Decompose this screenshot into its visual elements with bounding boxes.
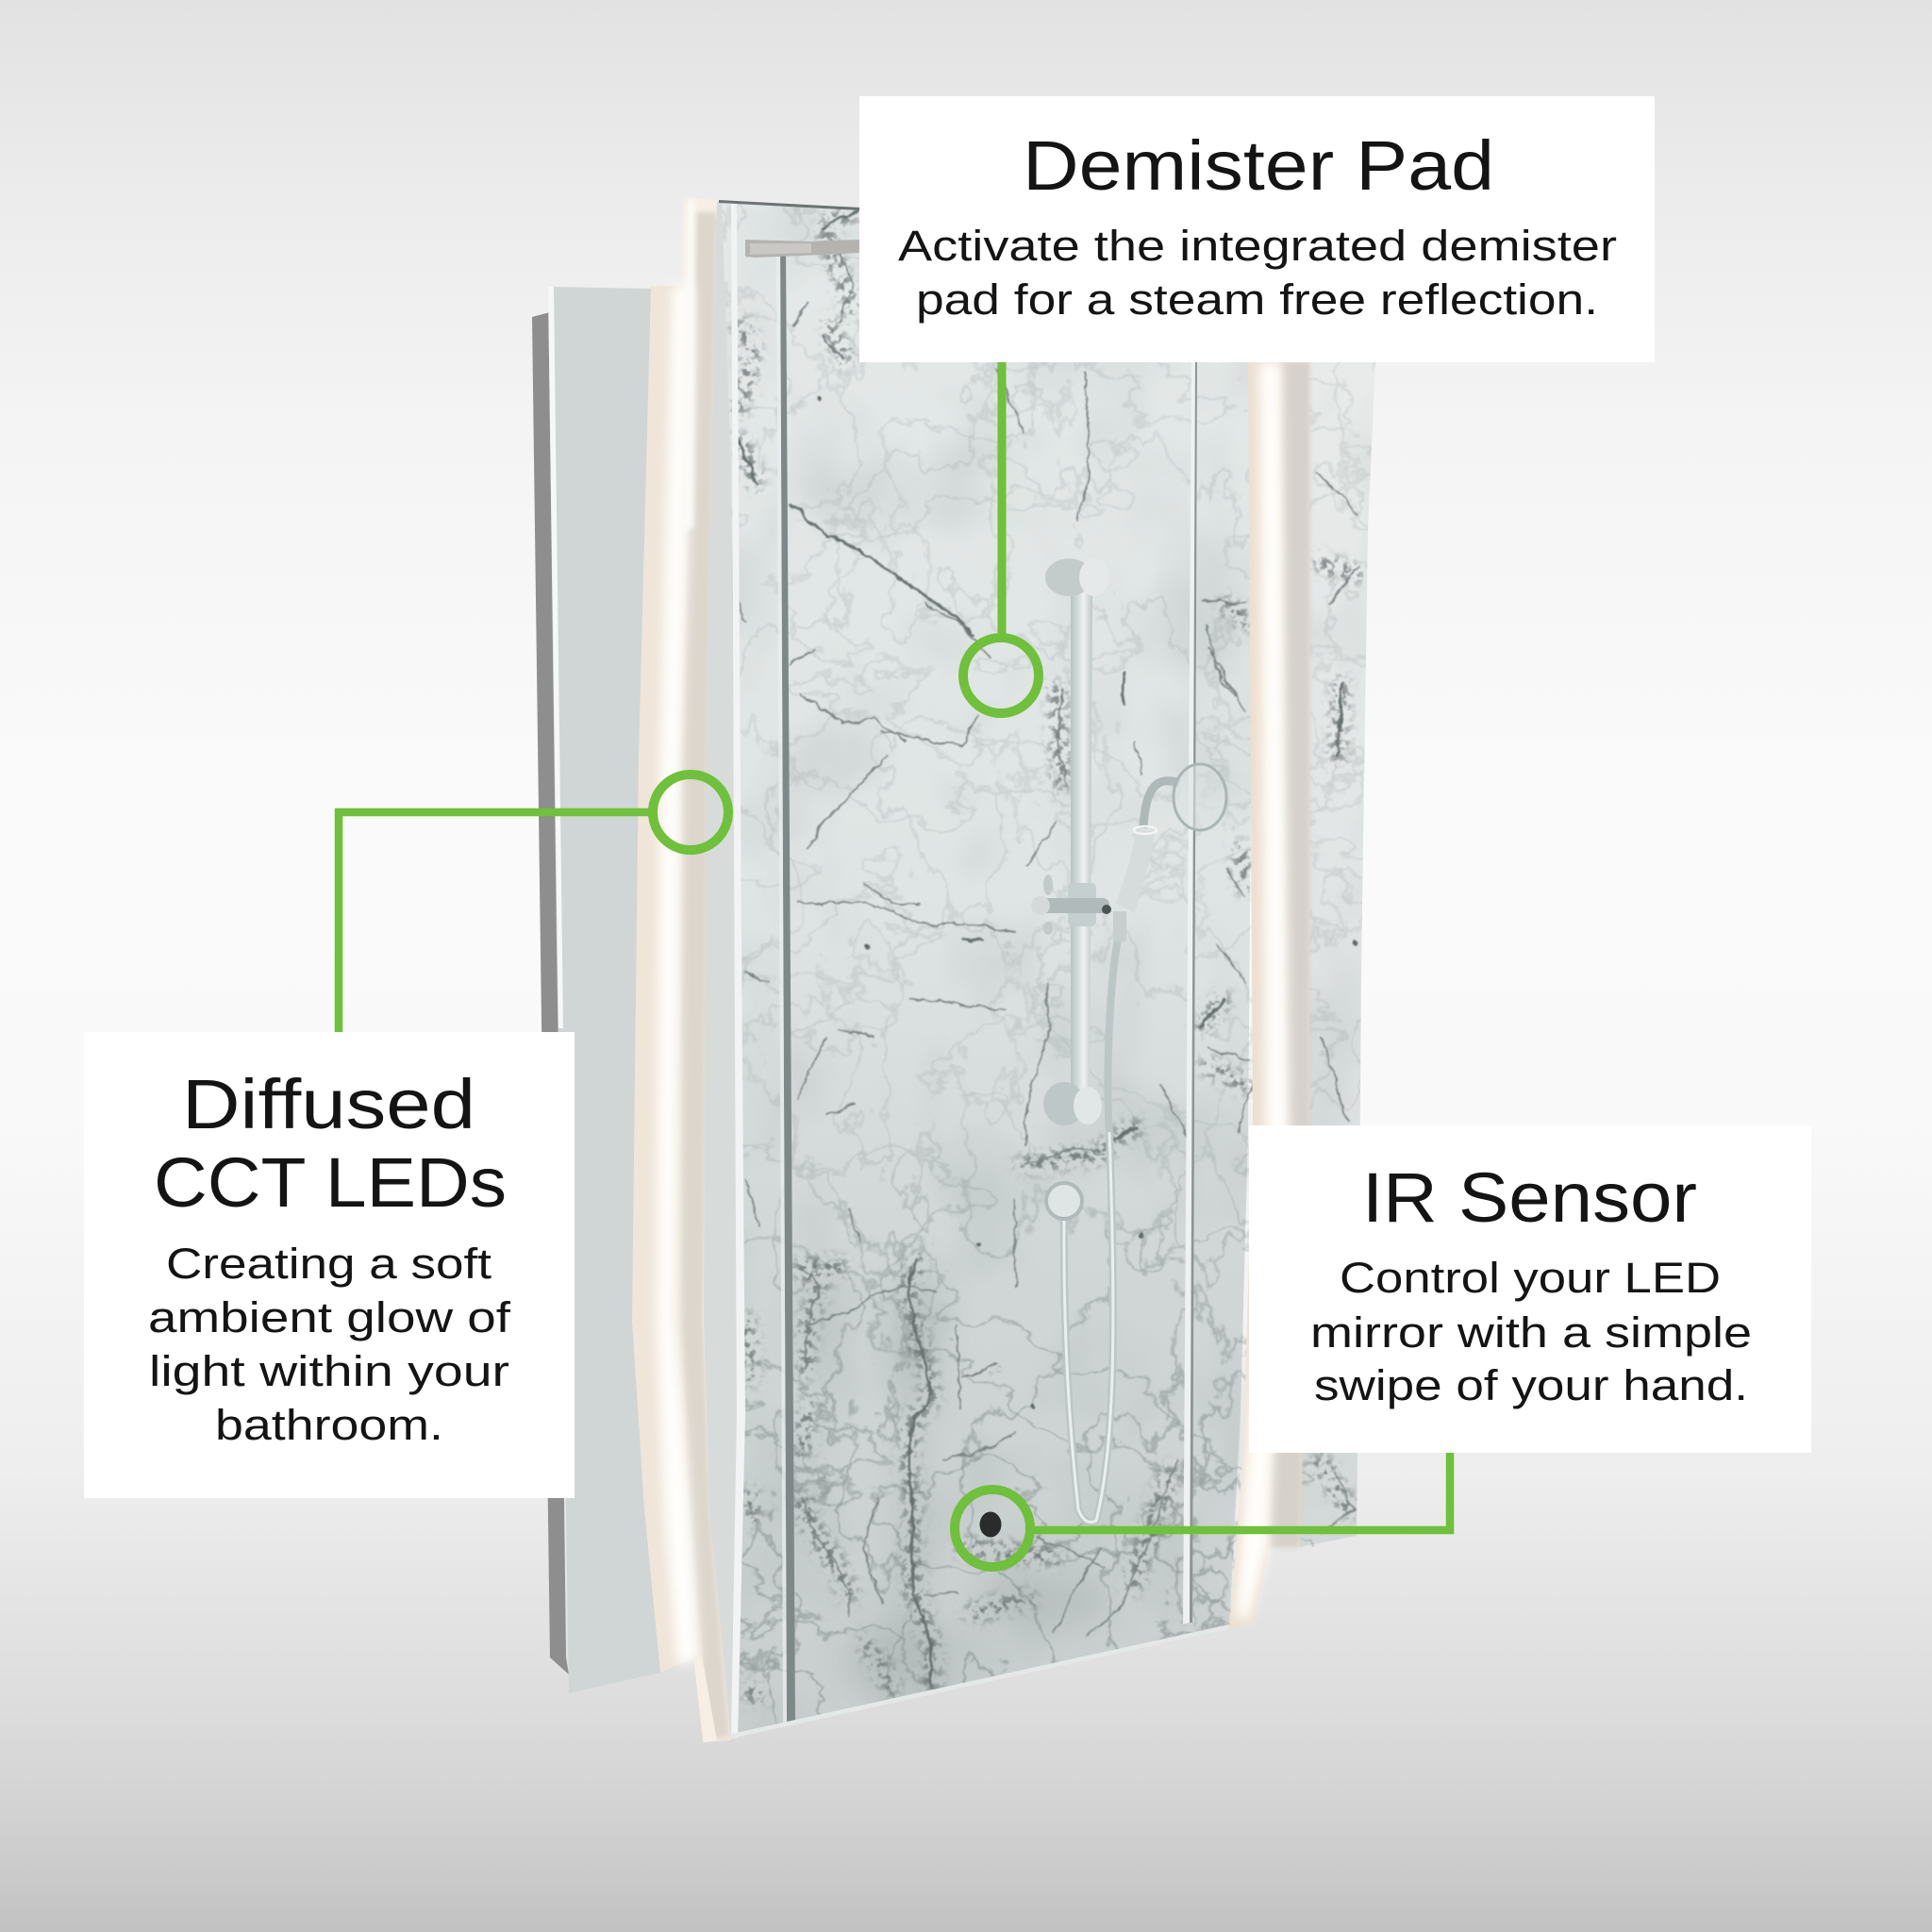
bottom edge highlight bbox=[731, 1624, 1229, 1739]
mirror illustration bbox=[532, 189, 1396, 1755]
description: ambient glow of bbox=[148, 1293, 511, 1341]
hose connector bbox=[1113, 911, 1126, 941]
left dark channel line bbox=[780, 247, 795, 1723]
warm glow base bbox=[1229, 362, 1309, 1629]
dark specks bbox=[818, 400, 1356, 1407]
slider valve bbox=[1031, 874, 1111, 935]
ir sensor dot bbox=[979, 1511, 1002, 1538]
shower fitting bbox=[1031, 558, 1226, 1523]
callout: demister pad bbox=[859, 96, 1655, 362]
lower bracket bbox=[1043, 1082, 1102, 1125]
grey side band bbox=[704, 202, 740, 1739]
description: mirror with a simple bbox=[1310, 1308, 1752, 1357]
wall bar bbox=[745, 240, 860, 258]
beige shaded band bbox=[1269, 362, 1309, 1547]
top edge dark line bbox=[719, 200, 860, 210]
callout: diffused CCT LEDs bbox=[84, 1032, 575, 1498]
left channel highlight bbox=[776, 247, 787, 1723]
heading: CCT LEDs bbox=[154, 1143, 507, 1222]
veins bbox=[738, 209, 1358, 1687]
warm glow band bbox=[632, 198, 731, 1742]
rail bbox=[1071, 590, 1092, 1094]
heading: IR Sensor bbox=[1362, 1158, 1697, 1237]
description: swipe of your hand. bbox=[1314, 1361, 1748, 1409]
bar highlight bbox=[750, 243, 811, 255]
heading: Demister Pad bbox=[1023, 126, 1494, 205]
upper panel bright strip bbox=[681, 200, 695, 528]
bright top wash bbox=[686, 198, 719, 219]
description: Activate the integrated demister bbox=[898, 222, 1617, 270]
description bbox=[898, 222, 1617, 324]
connector: IR sensor bbox=[955, 1453, 1450, 1567]
shower head bbox=[1174, 764, 1226, 830]
marble textures bbox=[698, 189, 1396, 1755]
description bbox=[1310, 1254, 1752, 1409]
description: Creating a soft bbox=[166, 1240, 492, 1288]
lower left bright edge bbox=[693, 1656, 717, 1742]
heading: Diffused bbox=[182, 1065, 475, 1143]
connector: demister bbox=[963, 362, 1039, 713]
description: Control your LED bbox=[1340, 1254, 1721, 1302]
left wall panel bbox=[548, 287, 660, 1693]
lower shading bbox=[800, 1264, 1113, 1698]
bar body bbox=[745, 240, 860, 258]
back edge strip bbox=[532, 312, 569, 1674]
hose highlight bbox=[1064, 1132, 1113, 1523]
connector: LEDs bbox=[339, 774, 728, 1032]
right LED glow bbox=[1229, 362, 1309, 1629]
mottled clouding bbox=[732, 207, 1372, 1560]
white LED core bbox=[1236, 362, 1289, 1618]
wall panel highlight edge bbox=[548, 287, 563, 1028]
callout: IR sensor bbox=[1249, 1125, 1811, 1453]
description: bathroom. bbox=[215, 1401, 443, 1449]
panel left edge highlight bbox=[731, 202, 745, 1739]
right channel core bbox=[1190, 362, 1197, 1623]
description bbox=[148, 1240, 511, 1449]
handle collar bbox=[1134, 826, 1157, 834]
right channel line bbox=[1183, 362, 1197, 1624]
white LED core bbox=[657, 286, 698, 1665]
fine vein network bbox=[698, 189, 1396, 1755]
left LED glow bbox=[632, 198, 731, 1742]
description: pad for a steam free reflection. bbox=[916, 275, 1598, 324]
main marble panel bbox=[722, 201, 1377, 1739]
description: light within your bbox=[149, 1347, 509, 1395]
hose bbox=[1064, 934, 1119, 1523]
top bracket bbox=[1045, 558, 1109, 596]
handle bbox=[1116, 830, 1155, 913]
heading bbox=[154, 1065, 507, 1222]
dense vein speckle bbox=[726, 209, 1368, 1709]
pivot ball bbox=[1046, 1183, 1082, 1219]
beige shaded band bbox=[681, 212, 728, 1738]
right side marble panel bbox=[1300, 362, 1375, 1547]
shower arm bbox=[1143, 781, 1179, 828]
